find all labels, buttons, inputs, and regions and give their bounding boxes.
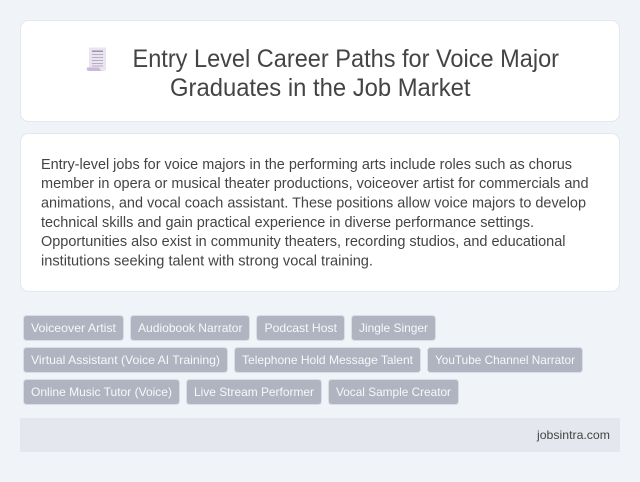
text block: description	[41, 157, 588, 270]
title	[132, 45, 559, 102]
footer bar	[20, 418, 620, 452]
text block: description: animations, and vocal coach assistant. These positions allow voice majors to develop	[41, 196, 586, 212]
tag: Podcast Host	[256, 316, 344, 340]
tag: YouTube Channel Narrator	[428, 348, 582, 372]
tag: Live Stream Performer	[186, 380, 322, 404]
tag: Live Stream Performer: Live Stream Performer	[194, 385, 314, 399]
tag: Jingle Singer: Jingle Singer	[359, 321, 428, 335]
tag: Virtual Assistant: Virtual Assistant (Voice AI Training)	[31, 353, 220, 367]
tag: Voiceover Artist: Voiceover Artist	[31, 321, 117, 335]
text block: description: institutions seeking talent with strong vocal training.	[41, 254, 373, 270]
tag: Vocal Sample Creator	[328, 380, 458, 404]
icon: paper scroll	[87, 48, 106, 71]
tag: Telephone Hold Message Talent	[234, 348, 420, 372]
tag: Voiceover Artist	[24, 316, 124, 340]
tag: Virtual Assistant	[24, 348, 228, 372]
tag: Online Music Tutor	[24, 380, 180, 404]
text block: description: Opportunities also exist in community theaters, recording studios, and educational	[41, 234, 566, 250]
text block: description: technical skills and gain practical experience in diverse performance settings.	[41, 215, 534, 231]
tag: Podcast Host: Podcast Host	[264, 321, 338, 335]
panel: title card	[20, 20, 620, 122]
text block: description: Entry-level jobs for voice majors in the performing arts include roles such as chorus	[41, 157, 572, 173]
tag: YouTube Channel Narrator: YouTube Channel Narrator	[435, 353, 575, 367]
tag: Audiobook Narrator: Audiobook Narrator	[138, 321, 242, 335]
footer credit: jobsintra.com	[536, 428, 610, 442]
text block: description: member in opera or musical theater productions, voiceover artist for commercials and	[41, 176, 588, 192]
panel: description card	[20, 134, 620, 292]
panel: job tags	[24, 316, 582, 404]
title: Entry Level Career Paths for Voice Major	[132, 45, 559, 73]
tag: Online Music Tutor: Online Music Tutor (Voice)	[31, 385, 172, 399]
tag: Jingle Singer	[352, 316, 436, 340]
tag: Audiobook Narrator	[130, 316, 250, 340]
tag: Vocal Sample Creator: Vocal Sample Creator	[336, 385, 451, 399]
title: Graduates in the Job Market	[170, 74, 471, 102]
tag: Telephone Hold Message Talent: Telephone Hold Message Talent	[242, 353, 414, 367]
